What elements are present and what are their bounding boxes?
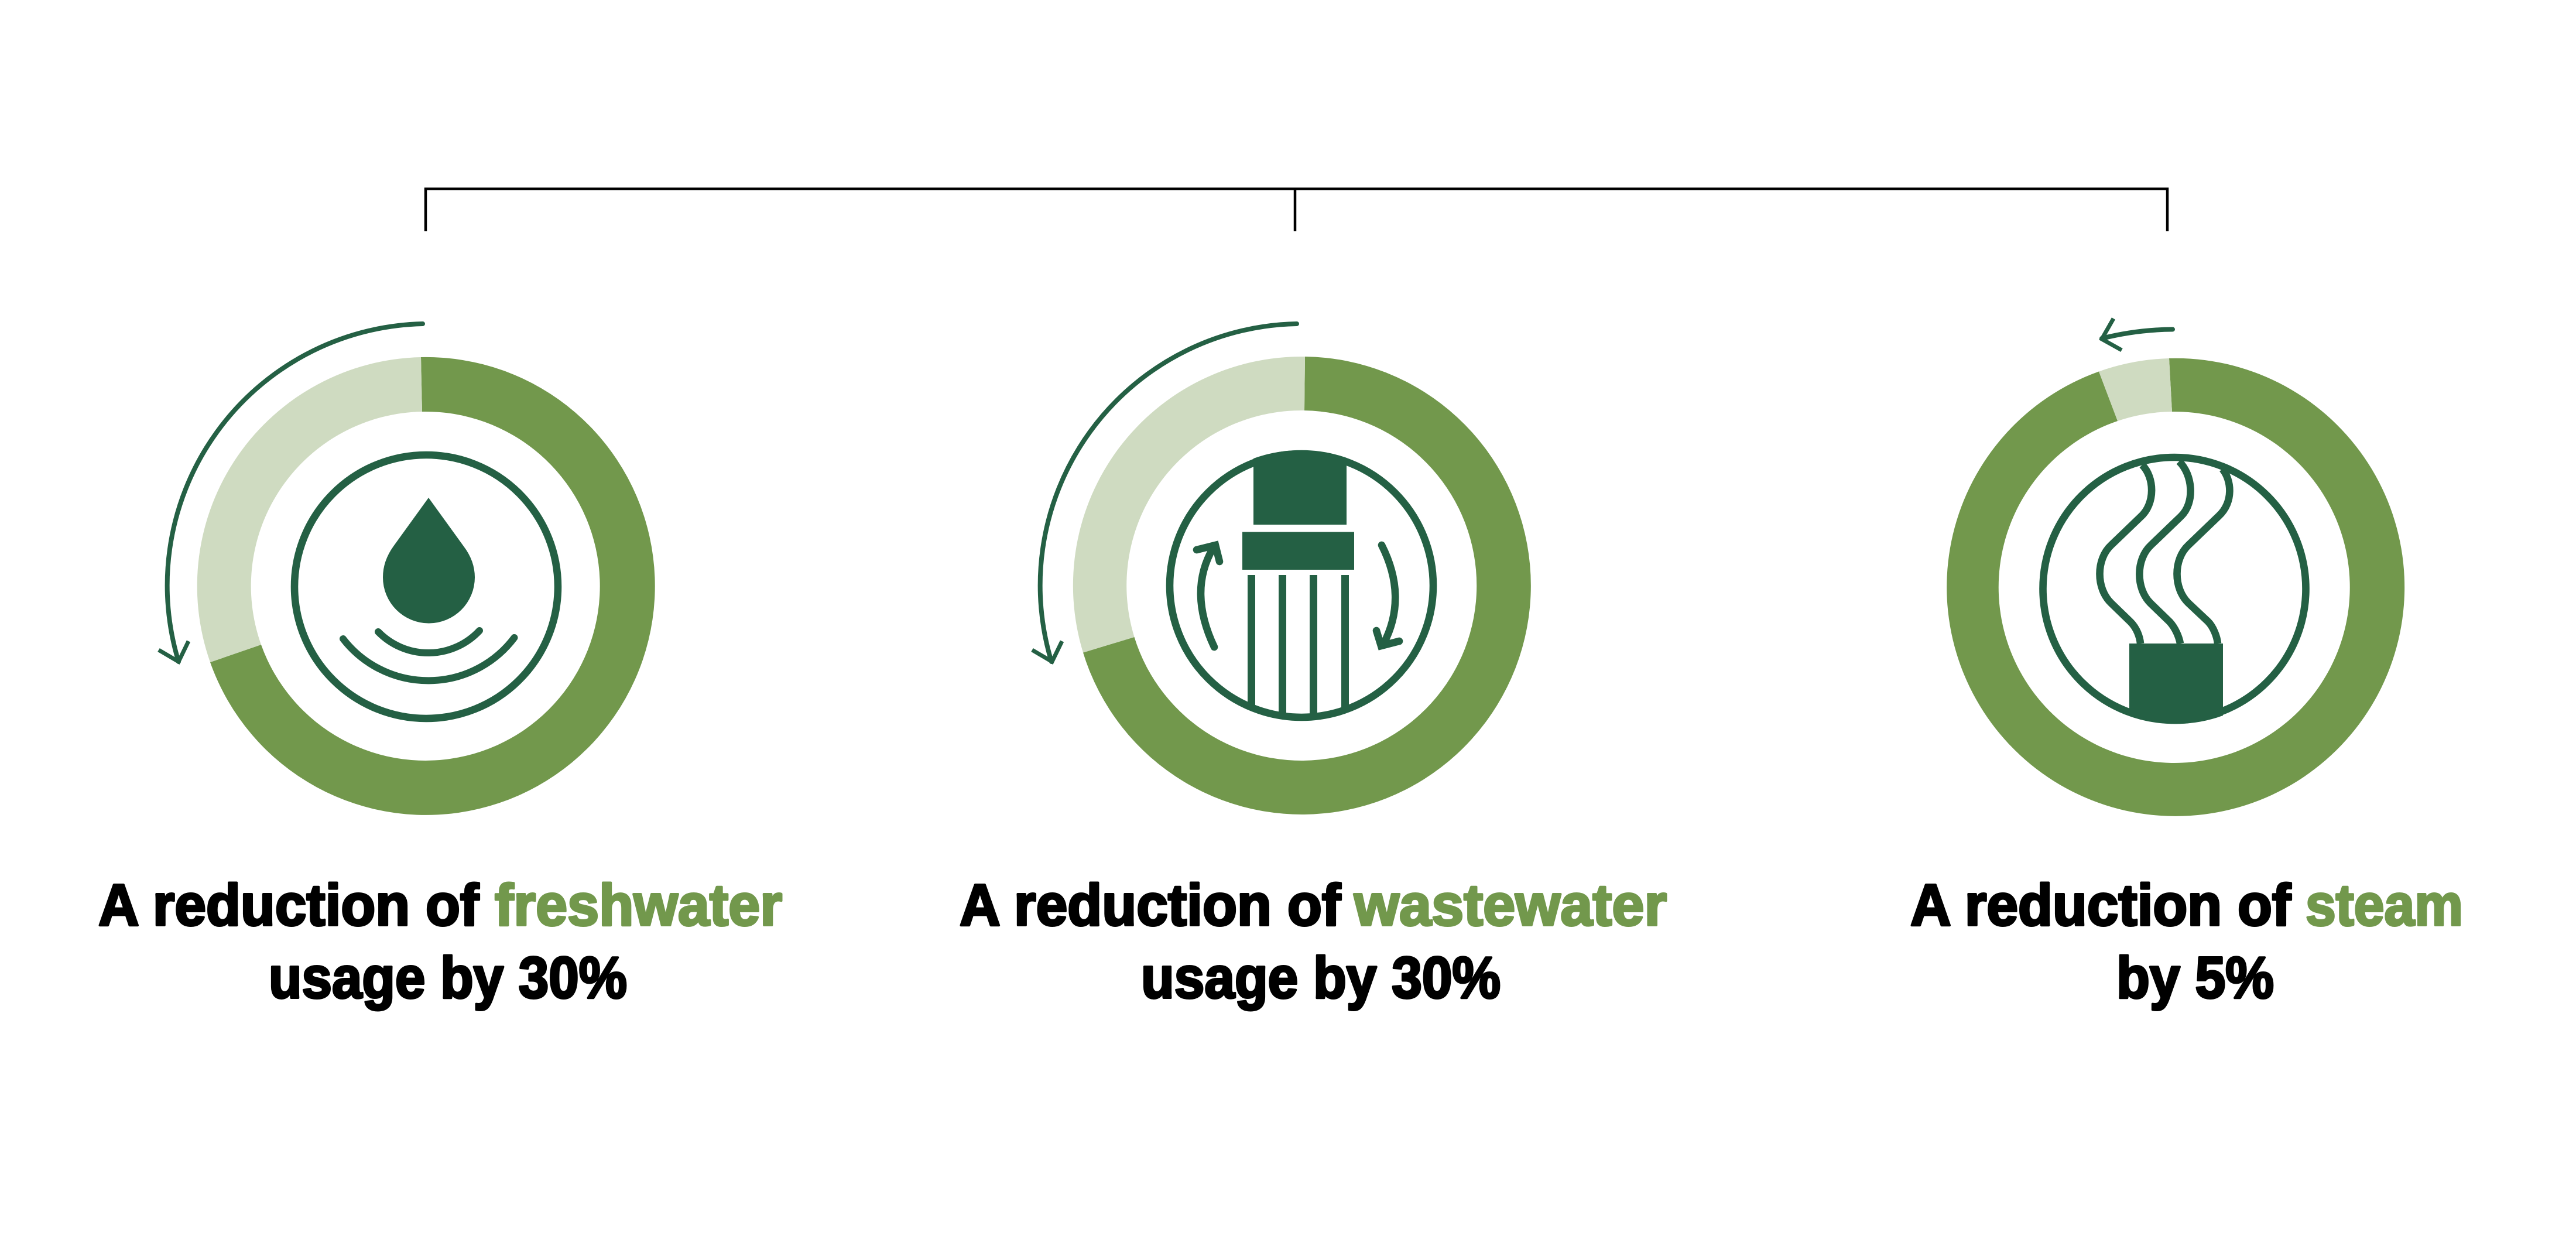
donut chart: steam 5% <box>1947 358 2404 816</box>
caption: steam: by 5% <box>2116 945 2274 1011</box>
bracket connector <box>426 189 2167 231</box>
caption: wastewater: wastewater <box>1354 872 1667 938</box>
caption: wastewater: A reduction of <box>960 872 1341 938</box>
icon: steam rising from block <box>2043 457 2306 724</box>
caption: wastewater: usage by 30% <box>1141 945 1501 1011</box>
panel: steam <box>1910 319 2463 1011</box>
caption: freshwater: freshwater <box>495 872 782 938</box>
icon: wastewater filter <box>1170 450 1433 717</box>
icon: water drop with ripples <box>294 455 558 718</box>
caption: steam <box>1910 872 2463 1011</box>
caption: steam: steam <box>2306 872 2463 938</box>
panel: wastewater <box>960 324 1667 1011</box>
arrow: steam reduction <box>2102 319 2173 350</box>
caption: freshwater: usage by 30% <box>269 945 627 1011</box>
arrow: wastewater reduction <box>1032 324 1297 662</box>
donut chart: wastewater 30% <box>1073 357 1531 814</box>
arrow: freshwater reduction <box>159 324 423 662</box>
caption: steam: A reduction of <box>1910 872 2291 938</box>
caption: wastewater <box>960 872 1667 1011</box>
panel: freshwater <box>98 324 782 1011</box>
caption: freshwater: A reduction of <box>98 872 479 938</box>
donut chart: freshwater 30% <box>197 357 655 815</box>
caption: freshwater <box>98 872 782 1011</box>
